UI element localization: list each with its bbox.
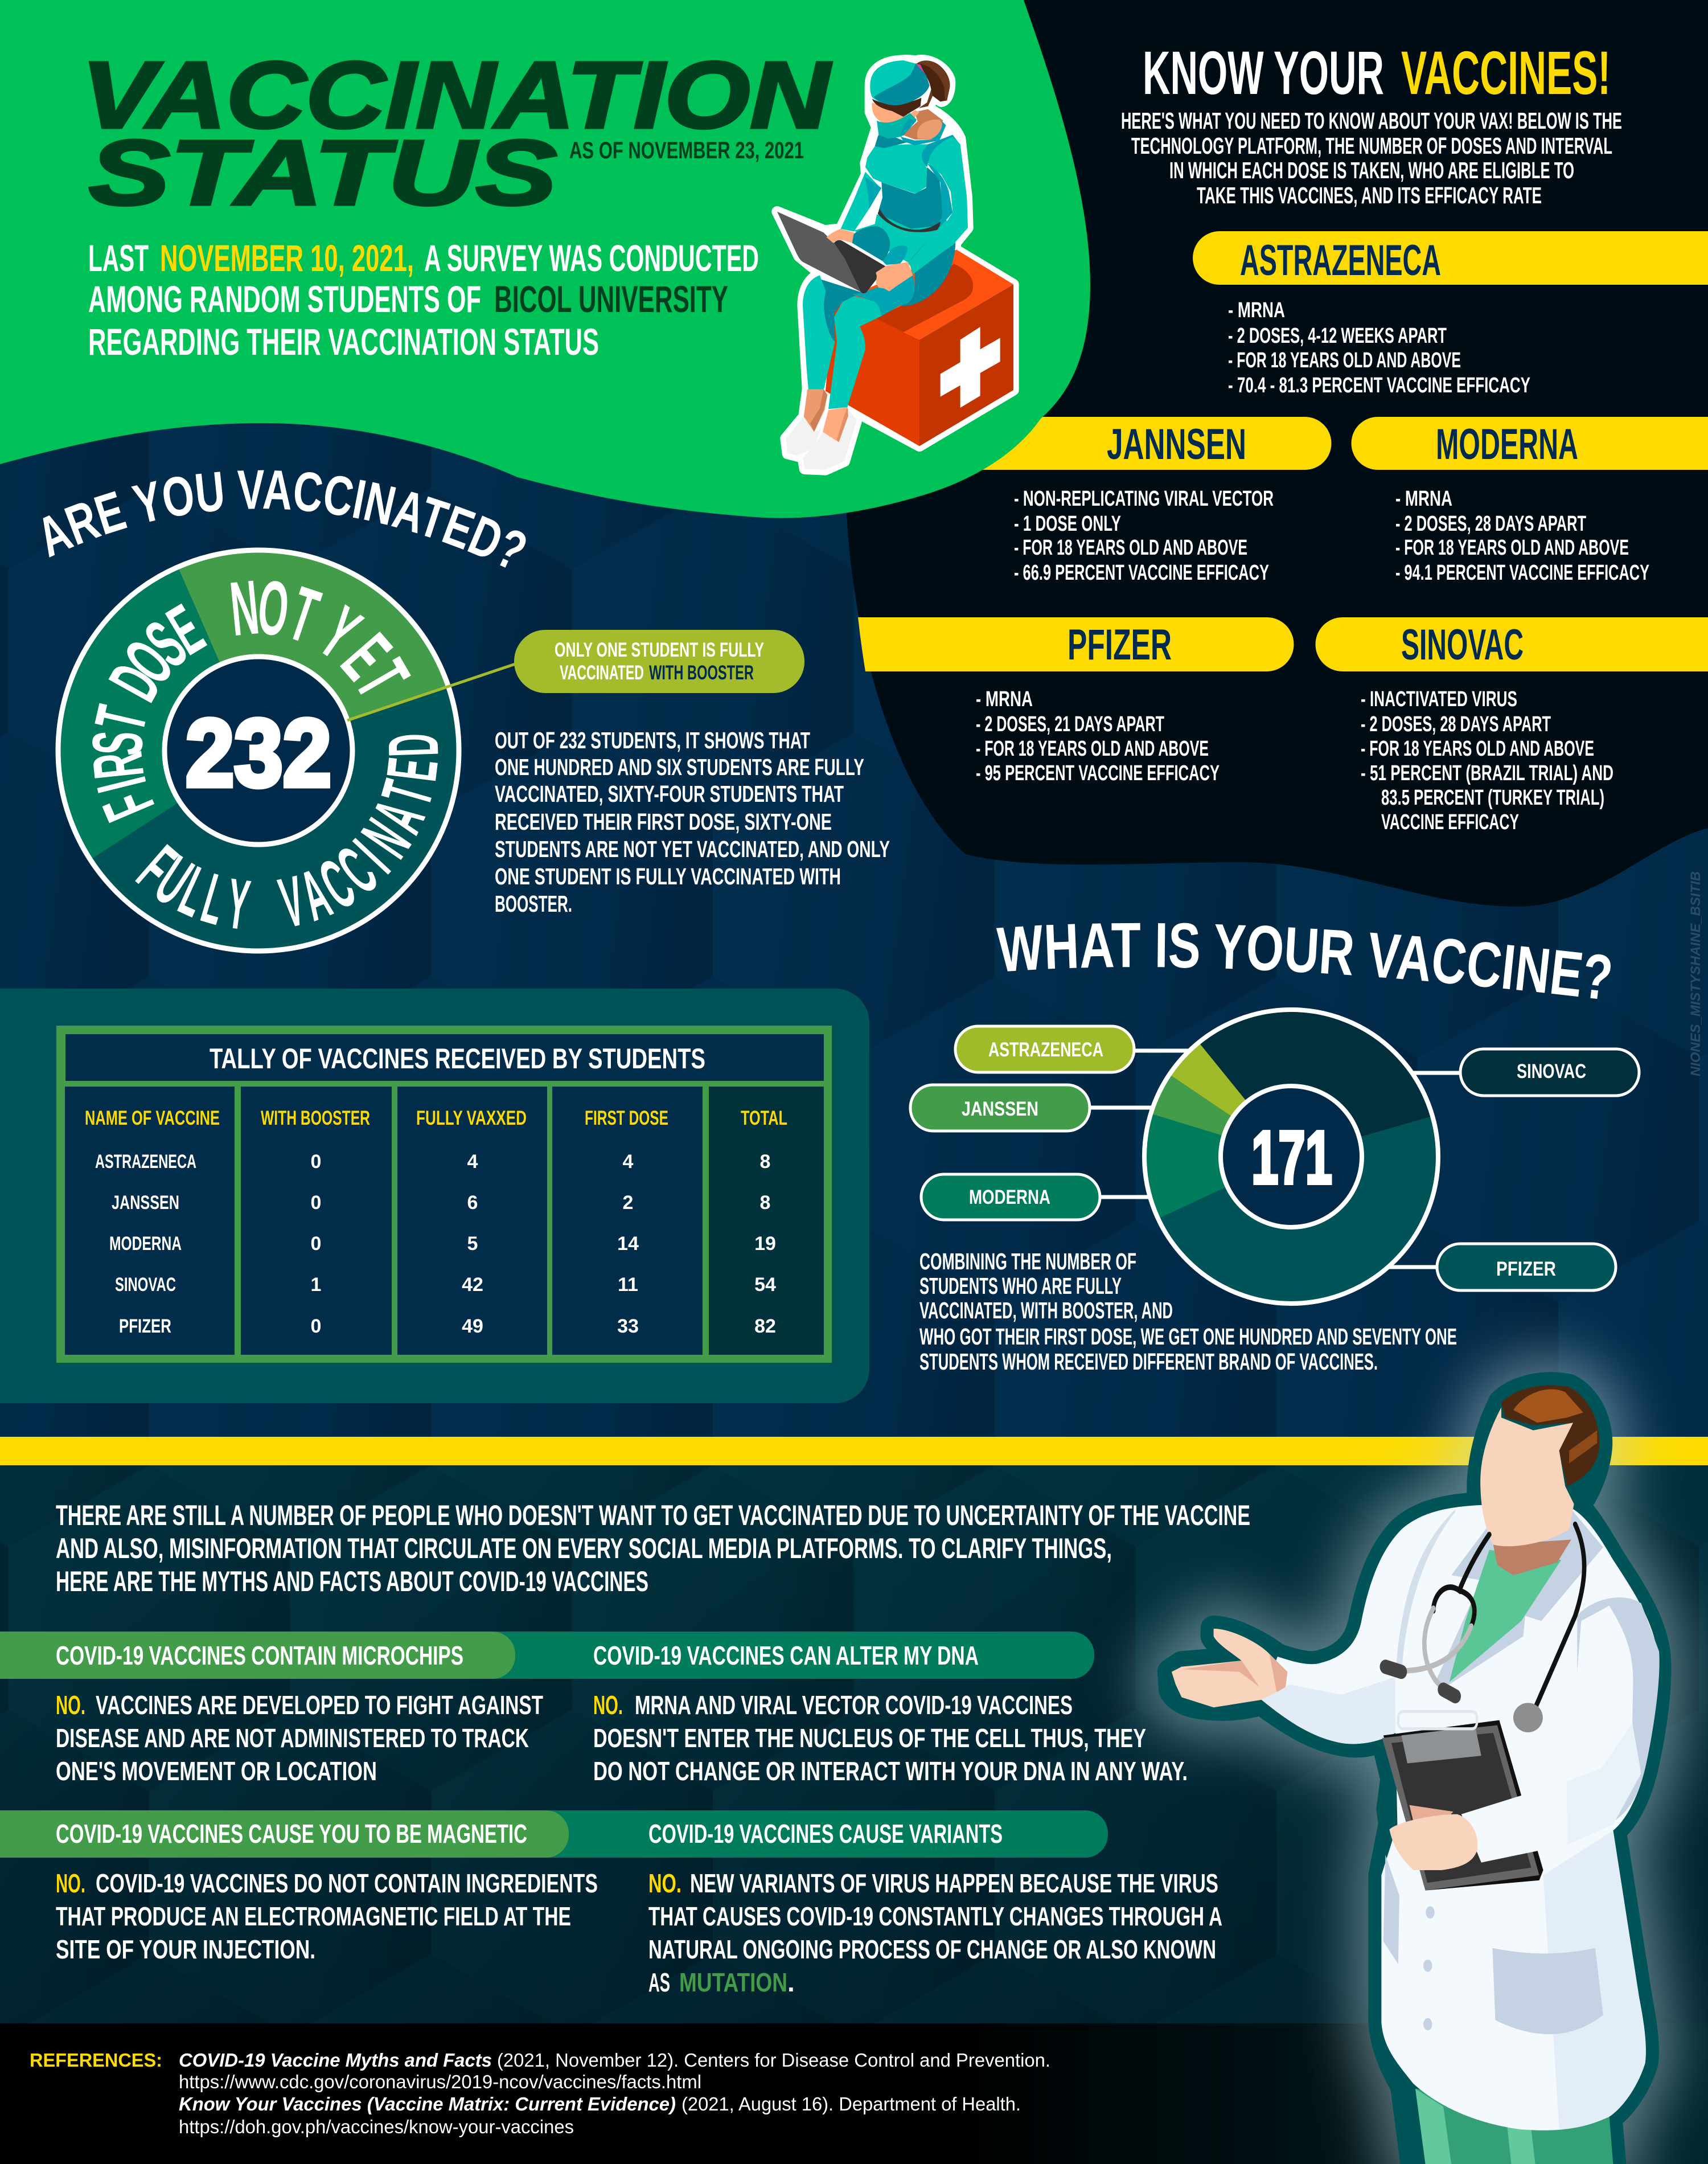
table rows: 6 xyxy=(467,1192,478,1214)
myth: microchips answer: DISEASE AND ARE NOT ADMINISTERED TO TRACK xyxy=(56,1723,529,1753)
pill: pfizer xyxy=(858,617,1294,671)
label: first dose xyxy=(77,589,216,831)
references: REFERENCES: xyxy=(30,2050,162,2071)
segment: first dose xyxy=(58,567,220,860)
myth row 2 bars: COVID-19 VACCINES CAUSE YOU TO BE MAGNETIC xyxy=(56,1819,527,1849)
label: fully vaccinated: F xyxy=(124,831,191,904)
card: pfizer xyxy=(976,621,1220,785)
table rows: 14 xyxy=(617,1233,639,1255)
stethoscope chest piece xyxy=(1513,1703,1543,1732)
buttons xyxy=(1423,1906,1435,2030)
yellow divider band xyxy=(0,1437,1708,1465)
text: status summary: VACCINATED, SIXTY-FOUR STUDENTS THAT xyxy=(495,781,844,807)
pill: sinovac xyxy=(1316,617,1708,671)
text: status summary xyxy=(495,727,890,917)
table rows: 4 xyxy=(623,1151,634,1173)
label: first dose: S xyxy=(77,729,158,757)
label: fully vaccinated: A xyxy=(358,789,440,843)
callout: booster xyxy=(347,630,804,720)
label: janssen: JANSSEN xyxy=(962,1098,1038,1120)
myth: microchips answer xyxy=(56,1690,543,1786)
label: fully vaccinated: T xyxy=(366,773,448,814)
references: (2021, August 16). Department of Health. xyxy=(681,2093,1021,2114)
label: astrazeneca: ASTRAZENECA xyxy=(988,1039,1103,1061)
table rows: 1 xyxy=(311,1274,321,1296)
watermark: NIONES_MISTYSHAINE_BSITIB xyxy=(1688,871,1703,1076)
collar and shirt xyxy=(1435,1509,1603,1685)
card: moderna: - 2 DOSES, 28 DAYS APART xyxy=(1395,512,1586,536)
label: fully vaccinated: A xyxy=(290,853,340,936)
card: jannsen: - 1 DOSE ONLY xyxy=(1014,512,1121,536)
survey intro text: LAST xyxy=(88,237,149,279)
segment: fully vaccinated xyxy=(91,687,459,951)
heading: are you vaccinated: ARE YOU VACCINATED? xyxy=(43,470,526,568)
myth: dna answer: MRNA AND VIRAL VECTOR COVID-19 VACCINES xyxy=(635,1690,1073,1720)
card: moderna xyxy=(1395,420,1649,585)
forearm and hand on clipboard xyxy=(1389,1723,1641,1870)
table rows: 42 xyxy=(462,1274,483,1296)
references: Know Your Vaccines (Vaccine Matrix: Current Evidence) xyxy=(179,2093,676,2114)
clipboard xyxy=(1382,1711,1543,1891)
table header row: TOTAL xyxy=(741,1107,787,1129)
card: pfizer: - MRNA xyxy=(976,687,1033,711)
label: fully vaccinated: V xyxy=(273,860,311,943)
segment: astrazeneca xyxy=(1169,1042,1247,1117)
myth row 1 bars: COVID-19 VACCINES CONTAIN MICROCHIPS xyxy=(56,1641,463,1670)
segment: janssen xyxy=(1151,1075,1233,1136)
myth: magnetic answer: NO. xyxy=(56,1868,85,1898)
text: status summary: BOOSTER. xyxy=(495,891,572,917)
text: vaccine summary xyxy=(919,1248,1457,1375)
survey intro text xyxy=(88,237,759,363)
myth: variants answer: MUTATION xyxy=(679,1968,787,1997)
title: VACCINATION xyxy=(81,43,832,148)
table rows: 19 xyxy=(754,1233,776,1255)
label: first dose: D xyxy=(94,651,176,712)
myth: magnetic answer xyxy=(56,1868,598,1964)
table rows: ASTRAZENECA xyxy=(95,1151,196,1173)
table rows: 11 xyxy=(618,1274,638,1296)
label: fully vaccinated: N xyxy=(347,806,425,870)
table rows: 82 xyxy=(754,1315,776,1337)
label: fully vaccinated: C xyxy=(307,843,367,924)
label: fully vaccinated: Y xyxy=(223,863,254,945)
coat pocket xyxy=(1492,1948,1603,2034)
segment: sinovac xyxy=(1199,1010,1432,1137)
card: jannsen: - 66.9 PERCENT VACCINE EFFICACY xyxy=(1014,561,1269,585)
text: vaccine summary: STUDENTS WHO ARE FULLY xyxy=(919,1273,1122,1299)
card: astrazeneca: - MRNA xyxy=(1228,298,1285,322)
text: vaccine summary: VACCINATED, WITH BOOSTER, AND xyxy=(919,1297,1173,1323)
intro text: myths: AND ALSO, MISINFORMATION THAT CIRCULATE ON EVERY SOCIAL MEDIA PLATFORMS. TO CLARIFY THINGS, xyxy=(56,1532,1112,1564)
stethoscope xyxy=(1385,1524,1584,1712)
references: https://www.cdc.gov/coronavirus/2019-ncov/vaccines/facts.html xyxy=(179,2071,701,2092)
card: sinovac: - FOR 18 YEARS OLD AND ABOVE xyxy=(1361,737,1594,761)
table rows: 49 xyxy=(462,1315,483,1337)
table rows: 0 xyxy=(311,1233,321,1255)
table rows xyxy=(95,1151,776,1337)
panel: green header blob xyxy=(0,0,1090,518)
myth: dna answer: DOESN'T ENTER THE NUCLEUS OF THE CELL THUS, THEY xyxy=(593,1723,1146,1753)
table rows: 8 xyxy=(760,1192,770,1214)
card: jannsen: - NON-REPLICATING VIRAL VECTOR xyxy=(1014,487,1274,511)
label: not yet xyxy=(227,563,426,711)
card: astrazeneca xyxy=(1228,236,1530,397)
card: jannsen: JANNSEN xyxy=(1107,420,1246,469)
text: know your vaccines intro xyxy=(1121,108,1622,208)
label: sinovac xyxy=(1460,1049,1639,1096)
pill: astrazeneca xyxy=(1193,231,1708,285)
table rows: 0 xyxy=(311,1315,321,1337)
card: jannsen: - FOR 18 YEARS OLD AND ABOVE xyxy=(1014,536,1247,560)
label: pfizer: PFIZER xyxy=(1496,1258,1556,1280)
label: fully vaccinated: D xyxy=(373,732,454,758)
label: fully vaccinated xyxy=(124,732,454,945)
myth: magnetic answer: SITE OF YOUR INJECTION. xyxy=(56,1935,315,1964)
label: first dose: S xyxy=(131,606,201,682)
myth: variants answer: THAT CAUSES COVID-19 CONSTANTLY CHANGES THROUGH A xyxy=(648,1901,1222,1931)
panel: tally table xyxy=(0,989,869,1403)
table rows: JANSSEN xyxy=(112,1192,179,1214)
illustration: doctor xyxy=(1171,1385,1660,2164)
card: astrazeneca: - FOR 18 YEARS OLD AND ABOVE xyxy=(1228,349,1461,372)
survey intro text: BICOL UNIVERSITY xyxy=(494,278,728,320)
card: astrazeneca: - 2 DOSES, 4-12 WEEKS APART xyxy=(1228,324,1447,348)
footer background xyxy=(0,2023,1708,2164)
label: fully vaccinated: I xyxy=(339,826,404,887)
label: first dose: I xyxy=(82,770,161,799)
text: status summary: STUDENTS ARE NOT YET VACCINATED, AND ONLY xyxy=(495,836,890,862)
heading: know your vaccines: KNOW YOUR xyxy=(1143,38,1384,107)
trousers xyxy=(1415,2089,1613,2164)
myth: microchips answer: NO. xyxy=(56,1690,85,1720)
lab coat xyxy=(1262,1505,1660,2130)
glow behind doctor xyxy=(1171,1385,1658,2164)
card: moderna: MODERNA xyxy=(1436,420,1578,469)
text: status summary: ONE STUDENT IS FULLY VACCINATED WITH xyxy=(495,863,841,890)
myth row 1 bars xyxy=(0,1632,1094,1679)
chart: vaccination status donut xyxy=(58,550,459,951)
table header row: NAME OF VACCINE xyxy=(85,1107,220,1129)
table title: TALLY OF VACCINES RECEIVED BY STUDENTS xyxy=(210,1043,705,1075)
label: not yet: N xyxy=(227,564,262,652)
table header row: WITH BOOSTER xyxy=(261,1107,370,1129)
intro text: myths: HERE ARE THE MYTHS AND FACTS ABOUT COVID-19 VACCINES xyxy=(56,1565,648,1597)
table header row: FIRST DOSE xyxy=(585,1107,668,1129)
medical box xyxy=(826,249,1013,446)
card: pfizer: - 95 PERCENT VACCINE EFFICACY xyxy=(976,761,1220,785)
myth: microchips answer: VACCINES ARE DEVELOPED TO FIGHT AGAINST xyxy=(96,1690,543,1720)
myth row 2 bars xyxy=(0,1810,1108,1858)
total: 171: 171 xyxy=(1251,1116,1332,1199)
illustration: nurse on medical box xyxy=(777,60,1013,470)
survey intro text: NOVEMBER 10, 2021, xyxy=(160,237,414,279)
label: moderna: MODERNA xyxy=(969,1186,1050,1208)
myth: magnetic answer: THAT PRODUCE AN ELECTROMAGNETIC FIELD AT THE xyxy=(56,1901,571,1931)
outstretched hand xyxy=(1172,1629,1287,1707)
myth: variants answer: . xyxy=(787,1968,795,1997)
label: moderna xyxy=(921,1174,1100,1220)
text: vaccine summary: STUDENTS WHOM RECEIVED DIFFERENT BRAND OF VACCINES. xyxy=(919,1349,1378,1375)
card: sinovac xyxy=(1361,621,1613,834)
title xyxy=(81,43,832,224)
card: jannsen xyxy=(1014,420,1274,585)
doctor outline xyxy=(1171,1385,1658,2164)
callout: booster: VACCINATED xyxy=(560,662,644,684)
label: first dose: F xyxy=(88,780,169,831)
references: https://doh.gov.ph/vaccines/know-your-vaccines xyxy=(179,2116,574,2137)
chart: vaccine brand donut xyxy=(1090,1010,1460,1304)
title: STATUS xyxy=(89,121,557,224)
label: janssen xyxy=(910,1085,1090,1131)
heading: what is your vaccine: WHAT IS YOUR VACCINE? xyxy=(996,923,1611,999)
card: pfizer: - FOR 18 YEARS OLD AND ABOVE xyxy=(976,737,1209,761)
table rows: 8 xyxy=(760,1151,770,1173)
pill: moderna xyxy=(1352,417,1708,470)
label: first dose: O xyxy=(109,626,188,698)
segment: moderna xyxy=(1144,1114,1227,1219)
text: status summary: RECEIVED THEIR FIRST DOSE, SIXTY-ONE xyxy=(495,809,832,835)
myth: variants answer: AS xyxy=(648,1968,670,1997)
myth: dna answer: NO. xyxy=(593,1690,623,1720)
card: moderna: - MRNA xyxy=(1395,487,1452,511)
card: sinovac: SINOVAC xyxy=(1401,621,1524,669)
card: sinovac: 83.5 PERCENT (TURKEY TRIAL) xyxy=(1381,786,1604,810)
label: fully vaccinated: L xyxy=(194,858,235,940)
card: pfizer: PFIZER xyxy=(1068,621,1172,669)
label: first dose: T xyxy=(80,699,162,738)
total: 232: 232 xyxy=(186,699,331,806)
label: not yet: Y xyxy=(305,590,375,675)
label: first dose: R xyxy=(77,748,159,782)
table header row: FULLY VAXXED xyxy=(416,1107,527,1129)
label: sinovac: SINOVAC xyxy=(1517,1060,1586,1083)
label: not yet: E xyxy=(326,618,408,695)
label: pfizer xyxy=(1437,1244,1616,1290)
nurse figure xyxy=(777,60,968,470)
myth: variants answer: NO. xyxy=(648,1868,681,1898)
pill: jannsen xyxy=(854,417,1331,470)
date note: AS OF NOVEMBER 23, 2021 xyxy=(569,137,804,163)
label: fully vaccinated: U xyxy=(143,841,206,920)
label: not yet: T xyxy=(339,647,426,711)
callout: booster: WITH BOOSTER xyxy=(649,662,754,684)
myth: variants answer: NATURAL ONGOING PROCESS OF CHANGE OR ALSO KNOWN xyxy=(648,1935,1216,1964)
card: astrazeneca: - 70.4 - 81.3 PERCENT VACCINE EFFICACY xyxy=(1228,374,1530,397)
survey intro text: A SURVEY WAS CONDUCTED xyxy=(424,237,759,279)
label: not yet: T xyxy=(279,570,329,659)
panel: know your vaccines black blob xyxy=(847,0,1708,907)
face xyxy=(1480,1407,1574,1546)
callout: booster: ONLY ONE STUDENT IS FULLY xyxy=(555,639,764,661)
label: not yet: O xyxy=(254,563,293,653)
survey intro text: AMONG RANDOM STUDENTS OF xyxy=(88,278,481,320)
text: status summary: OUT OF 232 STUDENTS, IT SHOWS THAT xyxy=(495,727,810,753)
references: COVID-19 Vaccine Myths and Facts xyxy=(179,2050,492,2071)
card: sinovac: - 2 DOSES, 28 DAYS APART xyxy=(1361,712,1551,736)
table rows: 0 xyxy=(311,1151,321,1173)
label: fully vaccinated: C xyxy=(322,832,391,908)
text: vaccine summary: COMBINING THE NUMBER OF xyxy=(919,1248,1136,1274)
neck xyxy=(1493,1540,1571,1575)
myth: variants answer: NEW VARIANTS OF VIRUS HAPPEN BECAUSE THE VIRUS xyxy=(690,1868,1218,1898)
myth: variants answer xyxy=(648,1868,1222,1997)
card: astrazeneca: ASTRAZENECA xyxy=(1240,236,1441,285)
table rows: 0 xyxy=(311,1192,321,1214)
myth: microchips answer: ONE'S MOVEMENT OR LOCATION xyxy=(56,1756,377,1786)
myth: magnetic answer: COVID-19 VACCINES DO NOT CONTAIN INGREDIENTS xyxy=(96,1868,598,1898)
survey intro text: REGARDING THEIR VACCINATION STATUS xyxy=(88,321,599,363)
table rows: SINOVAC xyxy=(115,1274,176,1296)
text: status summary: ONE HUNDRED AND SIX STUDENTS ARE FULLY xyxy=(495,754,864,780)
intro text: myths xyxy=(56,1499,1250,1597)
myth row 1 bars: COVID-19 VACCINES CAN ALTER MY DNA xyxy=(593,1641,979,1670)
myth: dna answer xyxy=(593,1690,1188,1786)
card: sinovac: VACCINE EFFICACY xyxy=(1381,810,1519,834)
panel: vaccine pills xyxy=(854,231,1708,671)
myth row 2 bars: COVID-19 VACCINES CAUSE VARIANTS xyxy=(648,1819,1003,1849)
table rows: MODERNA xyxy=(109,1233,182,1255)
table rows: 5 xyxy=(467,1233,478,1255)
label: fully vaccinated: L xyxy=(169,851,220,932)
table rows: 54 xyxy=(754,1274,776,1296)
connector lines xyxy=(1090,1051,1460,1267)
label: fully vaccinated: E xyxy=(371,754,453,785)
label: first dose: E xyxy=(155,589,216,670)
segment: pfizer xyxy=(1158,1116,1438,1304)
references: (2021, November 12). Centers for Disease Control and Prevention. xyxy=(497,2050,1050,2071)
myth: dna answer: DO NOT CHANGE OR INTERACT WITH YOUR DNA IN ANY WAY. xyxy=(593,1756,1188,1786)
card: pfizer: - 2 DOSES, 21 DAYS APART xyxy=(976,712,1164,736)
label: astrazeneca xyxy=(955,1026,1134,1072)
card: sinovac: - INACTIVATED VIRUS xyxy=(1361,687,1517,711)
references xyxy=(30,2050,1050,2137)
table header row xyxy=(85,1107,787,1129)
table rows: 33 xyxy=(617,1315,639,1337)
table rows: 4 xyxy=(467,1151,478,1173)
segment: not yet xyxy=(178,550,449,720)
table rows: 2 xyxy=(623,1192,633,1214)
table rows: PFIZER xyxy=(119,1315,171,1337)
hair xyxy=(1501,1385,1599,1486)
